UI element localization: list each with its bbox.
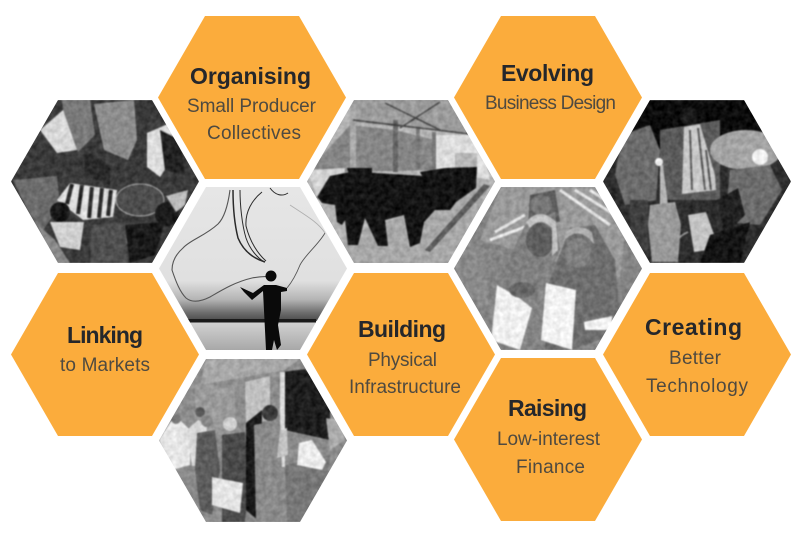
text: to Markets: to Markets: [60, 355, 150, 376]
text: Collectives: Collectives: [207, 123, 301, 144]
text: Small Producer: Small Producer: [187, 96, 317, 117]
text: Low-interest: Low-interest: [497, 429, 601, 450]
text: Business Design: Business Design: [485, 93, 616, 114]
panel: queue at shop photo hexagon: [159, 359, 347, 522]
text: Better: Better: [669, 348, 722, 369]
panel: fisherman casting net photo hexagon: [159, 187, 347, 350]
panel: Organising: [158, 16, 346, 179]
text: Finance: Finance: [516, 457, 585, 478]
panel: Linking: [11, 273, 199, 436]
panel: Creating: [603, 273, 791, 436]
panel: Raising: [454, 358, 642, 521]
panel: Building: [307, 273, 495, 436]
text: Physical: Physical: [368, 350, 437, 371]
text: Infrastructure: Infrastructure: [349, 377, 461, 398]
heading: Raising: Raising: [508, 395, 587, 421]
panel: Evolving: [454, 16, 642, 179]
text: Technology: Technology: [646, 376, 748, 397]
panel: buffalo shed photo hexagon: [307, 100, 495, 263]
heading: Linking: Linking: [67, 322, 143, 348]
panel: women holding papers photo hexagon: [454, 187, 642, 350]
heading: Creating: Creating: [645, 314, 742, 340]
panel: milk collection photo hexagon: [603, 100, 791, 263]
heading: Organising: Organising: [190, 63, 311, 89]
heading: Evolving: Evolving: [501, 60, 594, 86]
heading: Building: Building: [358, 316, 446, 342]
panel: market women photo hexagon: [11, 100, 199, 263]
